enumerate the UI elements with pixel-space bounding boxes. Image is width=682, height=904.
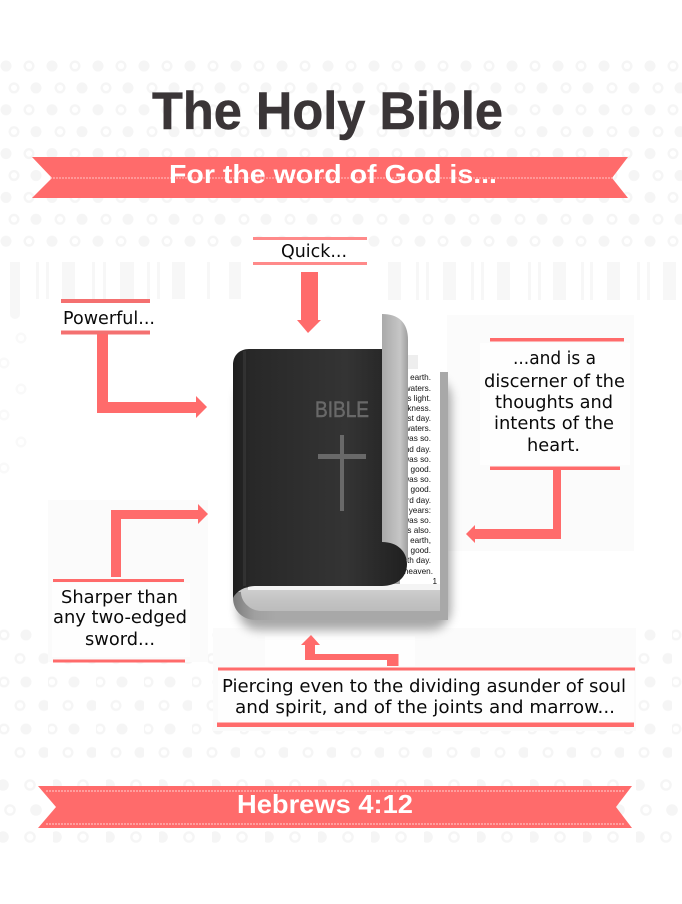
page text: | good.	[406, 465, 431, 474]
label: discerner: ...and is a	[513, 349, 596, 369]
label: piercing	[217, 668, 635, 727]
background dot pattern: footer	[0, 775, 682, 845]
background stripes right	[388, 262, 676, 300]
page text: waters.	[404, 424, 431, 433]
page text: | good.	[406, 546, 431, 555]
page text: heaven.	[404, 567, 433, 576]
label: discerner	[484, 338, 625, 470]
book shadow	[238, 378, 451, 630]
background dot pattern: top	[0, 58, 682, 248]
page block light band	[241, 588, 440, 611]
page text: rst day.	[405, 414, 431, 423]
arrow: piercing to book	[301, 635, 398, 666]
label: sharper: sword...	[85, 630, 155, 650]
page text: | good.	[406, 485, 431, 494]
label: sharper	[53, 579, 187, 662]
page text: earth.	[410, 373, 431, 382]
label: discerner: intents of the	[494, 414, 614, 434]
page text: rkness.	[405, 404, 431, 413]
page text	[402, 373, 437, 586]
label: discerner: discerner of the	[484, 372, 625, 392]
page	[400, 355, 440, 590]
background stripes left	[10, 262, 241, 319]
label: piercing: and spirit, and of the joints and marrow...	[235, 698, 615, 718]
banner: for the word of God is	[32, 157, 628, 198]
banner: Hebrews 4:12: Hebrews 4:12	[237, 789, 413, 819]
page shading	[408, 355, 418, 369]
arrow: quick to book	[297, 272, 321, 333]
banner: Hebrews 4:12	[38, 786, 632, 828]
label patch: sharper text	[52, 583, 190, 657]
arrow: discerner to book	[466, 470, 561, 543]
arrow: powerful to book	[97, 334, 207, 418]
cover title: BIBLE	[315, 397, 369, 422]
white page strip	[248, 584, 440, 590]
page text: s light.	[407, 394, 431, 403]
page text: l years:	[405, 506, 431, 515]
page text: waters.	[404, 384, 431, 393]
label: sharper: any two-edged	[53, 608, 187, 628]
faint rings left edge	[0, 334, 25, 472]
page text: was so.	[402, 455, 431, 464]
banner: for the word of God is: For the word of God is...	[169, 159, 497, 189]
curled page	[382, 314, 408, 560]
label: sharper: Sharper than	[61, 588, 178, 608]
page text: rd day.	[407, 496, 431, 505]
book	[233, 314, 451, 630]
label: powerful	[61, 299, 155, 334]
label: quick: Quick...	[281, 242, 347, 262]
background dot pattern: bottom	[0, 625, 682, 761]
page text: was so.	[402, 475, 431, 484]
label backdrop: piercing	[213, 628, 636, 731]
back cover	[400, 372, 448, 620]
label: powerful: Powerful...	[63, 309, 155, 329]
front cover	[233, 349, 407, 598]
label backdrop: sharper	[48, 500, 208, 662]
page text: 1	[432, 577, 437, 586]
label: discerner: thoughts and	[495, 393, 613, 413]
title: The Holy Bible	[152, 82, 503, 141]
label patch: piercing text	[218, 671, 634, 723]
label patch: piercing arrow area	[265, 636, 415, 666]
cross	[318, 435, 366, 511]
page text: was so.	[402, 434, 431, 443]
page text: e earth,	[403, 536, 431, 545]
spine highlight	[243, 351, 246, 586]
arrow: sharper to book	[111, 504, 208, 577]
page text: nd day.	[405, 445, 431, 454]
page block outer edge	[233, 592, 448, 620]
label backdrop: discerner	[447, 315, 634, 551]
page text: was so.	[402, 516, 431, 525]
label: piercing: Piercing even to the dividing asunder of soul	[222, 677, 626, 697]
page text: th day.	[407, 556, 431, 565]
label: discerner: heart.	[527, 436, 580, 456]
page text: rs also.	[405, 526, 431, 535]
label patch: discerner text	[480, 343, 630, 465]
label: quick	[253, 237, 367, 265]
